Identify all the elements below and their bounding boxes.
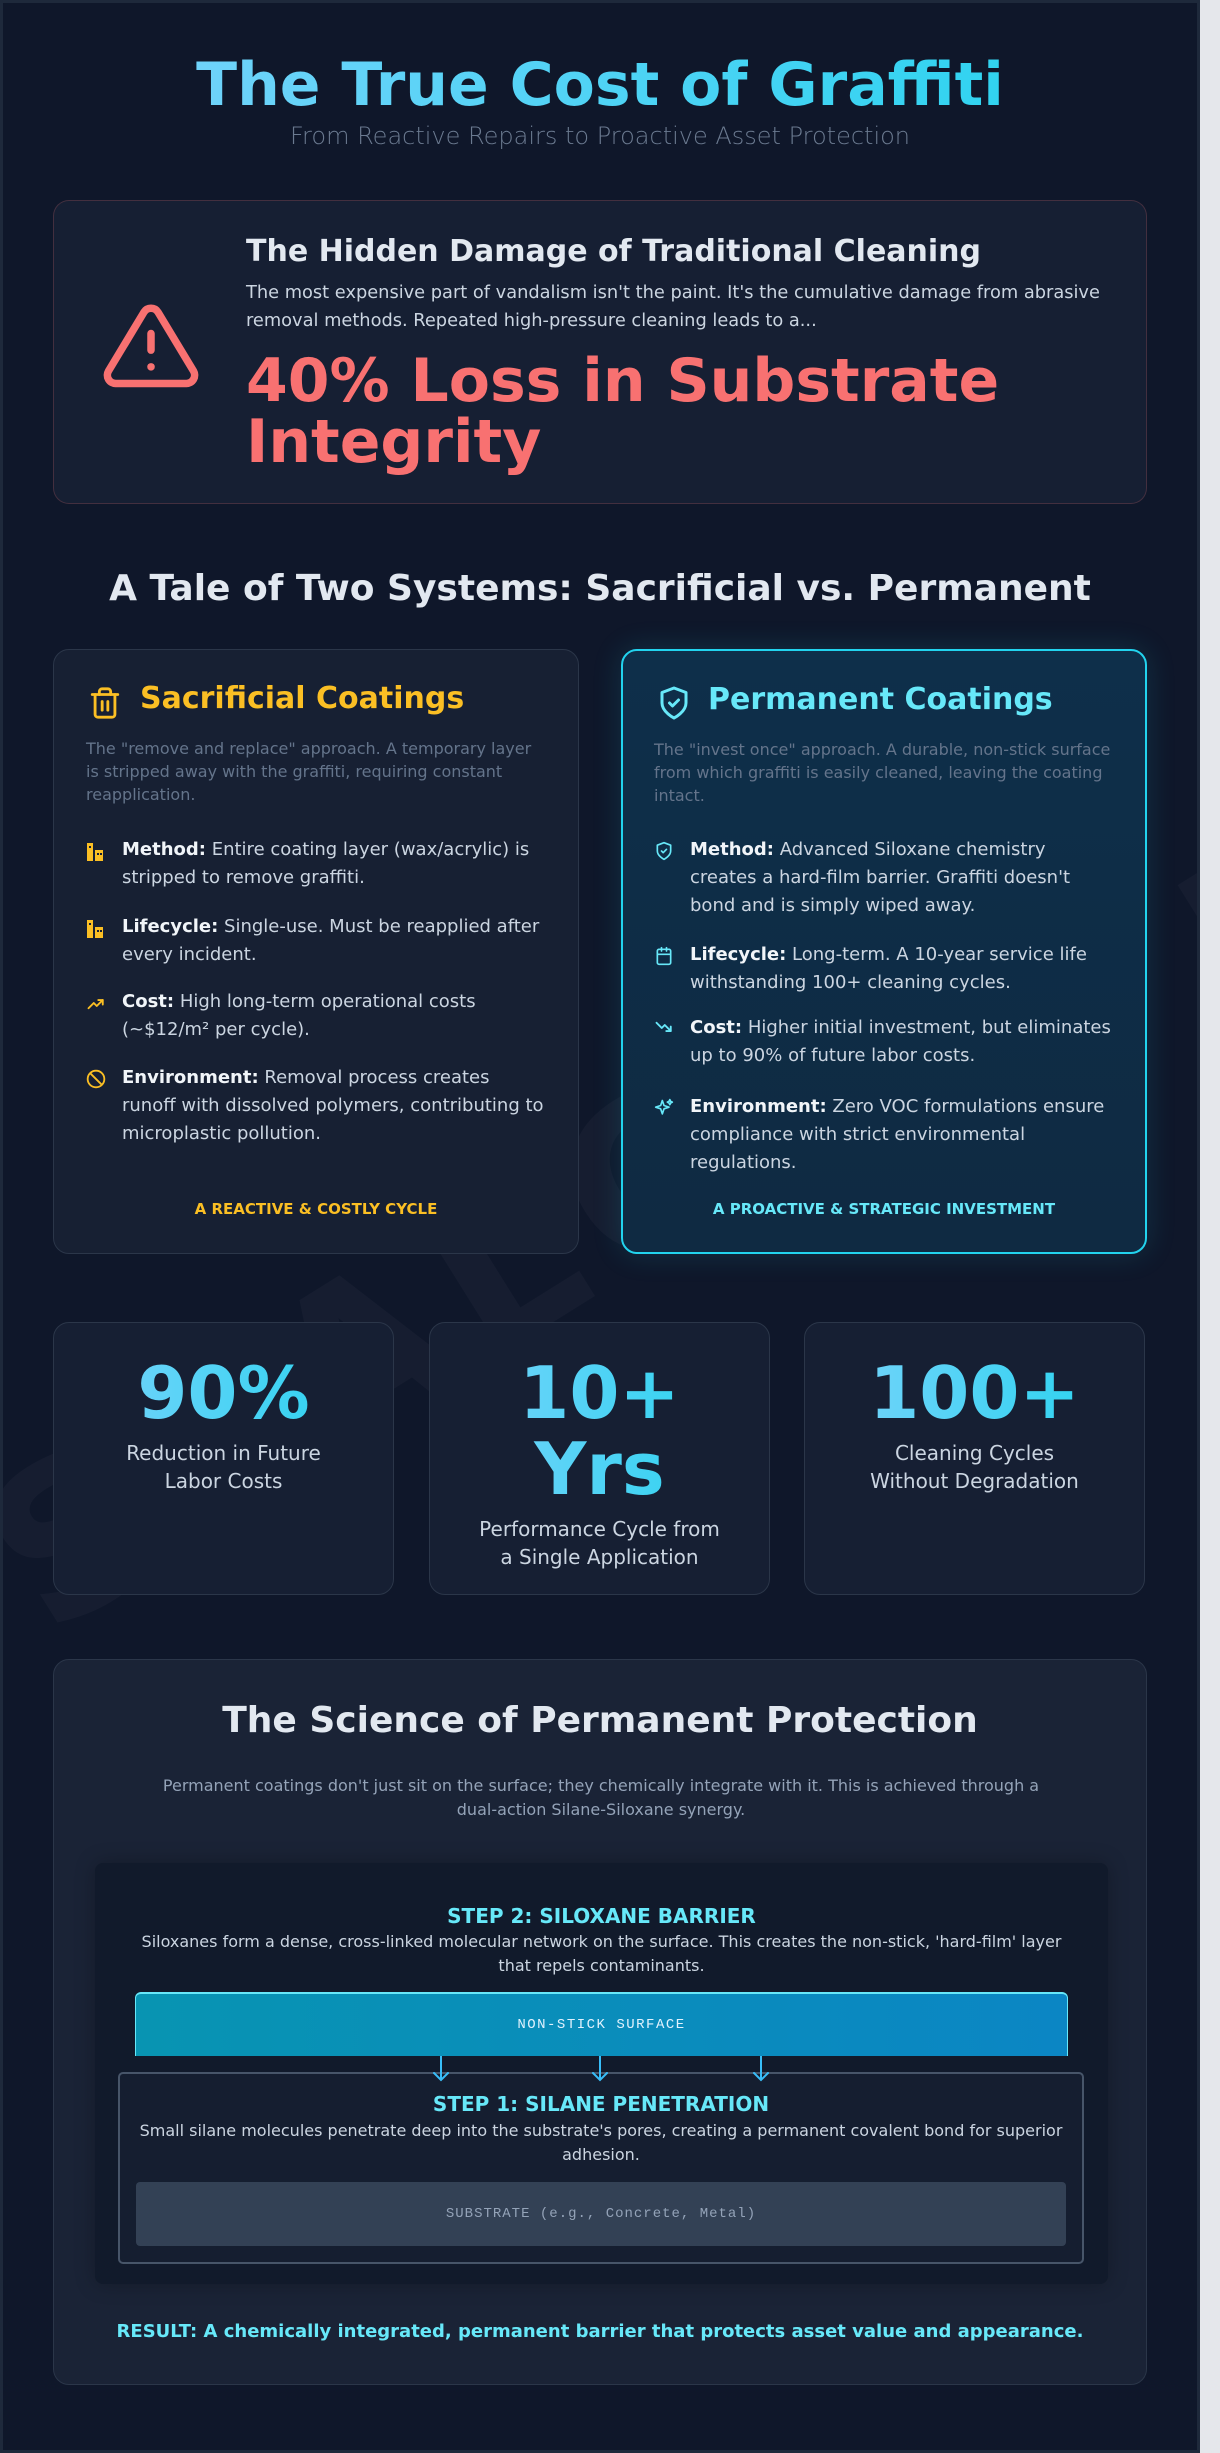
item: environment: [86, 1067, 544, 1144]
step 1 heading: STEP 1: SILANE PENETRATION: [433, 2092, 769, 2116]
panel: hidden damage: [53, 200, 1147, 504]
panel: permanent coatings: Lifecycle: Long-term. A 10-year service life withstanding 100+ cleaning cycles.: [690, 944, 1087, 993]
item: cost: [88, 991, 476, 1040]
panel: science of permanent protection: [53, 1659, 1147, 2385]
item: cost: [656, 1017, 1111, 1066]
stat card: 10+ yrs: Yrs: [534, 1427, 665, 1511]
step 1 text: Small silane molecules penetrate deep into the substrate's pores, creating a permanent covalent bond for superior adhesion.: [140, 2121, 1062, 2164]
stat card: 90%: [53, 1322, 394, 1595]
stat card: 10+ yrs: 10+: [519, 1351, 680, 1435]
stat card: 100+: Without Degradation: [870, 1469, 1079, 1493]
subtitle: From Reactive Repairs to Proactive Asset Protection: [290, 122, 910, 150]
stat card: 10+ yrs: a Single Application: [500, 1545, 699, 1569]
item: lifecycle: [656, 944, 1087, 993]
item: environment: [654, 1096, 1104, 1173]
diagram: [95, 1863, 1108, 2284]
panel: sacrificial coatings: runoff with dissolved polymers, contributing to microplastic pollution.: [122, 1095, 544, 1144]
panel: sacrificial coatings: [53, 649, 579, 1254]
big stat: 40% Loss in Substrate Integrity: [246, 346, 999, 477]
title: [3, 45, 1197, 125]
panel: permanent coatings: Cost: Higher initial investment, but eliminates up to 90% of future labor costs.: [690, 1017, 1111, 1066]
substrate bar: [136, 2182, 1066, 2246]
item: lifecycle: [87, 916, 540, 965]
panel: sacrificial coatings: Method: Entire coating layer (wax/acrylic) is stripped to remove graffiti.: [122, 839, 529, 888]
panel: sacrificial coatings: Environment: Removal process creates: [122, 1067, 490, 1088]
stat card: 90%: 90%: [137, 1351, 310, 1435]
result text: RESULT: A chemically integrated, permanent barrier that protects asset value and appearance.: [117, 2321, 1083, 2342]
icon: trash: [90, 687, 120, 719]
arrows: [433, 2056, 769, 2082]
step 2 heading: STEP 2: SILOXANE BARRIER: [447, 1904, 756, 1928]
panel: permanent coatings: Environment: Zero VOC formulations ensure compliance with strict environmental regulations.: [690, 1096, 1104, 1173]
panel: permanent coatings: Method: Advanced Siloxane chemistry creates a hard-film barrier. Graffiti doesn't bond and is simply wiped away.: [690, 839, 1070, 916]
footer label: A REACTIVE & COSTLY CYCLE: [195, 1200, 437, 1218]
substrate bar: SUBSTRATE (e.g., Concrete, Metal): [446, 2206, 756, 2222]
panel: permanent coatings: [621, 649, 1147, 1254]
icon: warning triangle: [104, 304, 198, 388]
icon: shield check: [660, 686, 688, 720]
non-stick surface bar: [135, 1992, 1068, 2056]
item: method: [656, 839, 1070, 916]
description: Permanent coatings don't just sit on the surface; they chemically integrate with it. This is achieved through a dual-action Silane-Siloxane synergy.: [163, 1776, 1039, 1819]
heading: The Hidden Damage of Traditional Cleaning: [246, 234, 981, 269]
heading: The Science of Permanent Protection: [222, 1700, 978, 1741]
description: The "remove and replace" approach. A temporary layer is stripped away with the graffiti, requiring constant reapplication.: [86, 739, 531, 804]
body text: The most expensive part of vandalism isn't the paint. It's the cumulative damage from abrasive removal methods. Repeated high-pressure cleaning leads to a...: [246, 282, 1100, 331]
item: method: [87, 839, 529, 888]
title: The True Cost of Graffiti: [196, 50, 1004, 120]
stat card: 10+ yrs: Performance Cycle from: [479, 1517, 720, 1541]
stat card: 90%: Labor Costs: [165, 1469, 282, 1493]
stat card: 10+ yrs: [429, 1322, 770, 1595]
non-stick surface bar: NON-STICK SURFACE: [517, 2017, 686, 2033]
step 2 text: Siloxanes form a dense, cross-linked molecular network on the surface. This creates the non-stick, 'hard-film' layer that repels contaminants.: [142, 1932, 1061, 1975]
stat card: 100+: Cleaning Cycles: [895, 1441, 1054, 1465]
heading: Sacrificial Coatings: [140, 681, 464, 716]
stat card: 100+: 100+: [869, 1351, 1080, 1435]
section heading: A Tale of Two Systems: Sacrificial vs. Permanent: [109, 568, 1091, 609]
step 1 box: [118, 2072, 1084, 2264]
footer label: A PROACTIVE & STRATEGIC INVESTMENT: [713, 1200, 1055, 1218]
stat card: 100+: [804, 1322, 1145, 1595]
stat card: 90%: Reduction in Future: [126, 1441, 321, 1465]
description: The "invest once" approach. A durable, non-stick surface from which graffiti is easily cleaned, leaving the coating intact.: [654, 740, 1110, 805]
panel: sacrificial coatings: Cost: High long-term operational costs (~$12/m² per cycle).: [122, 991, 476, 1040]
heading: Permanent Coatings: [708, 682, 1053, 717]
panel: sacrificial coatings: Lifecycle: Single-use. Must be reapplied after every incident.: [122, 916, 539, 965]
